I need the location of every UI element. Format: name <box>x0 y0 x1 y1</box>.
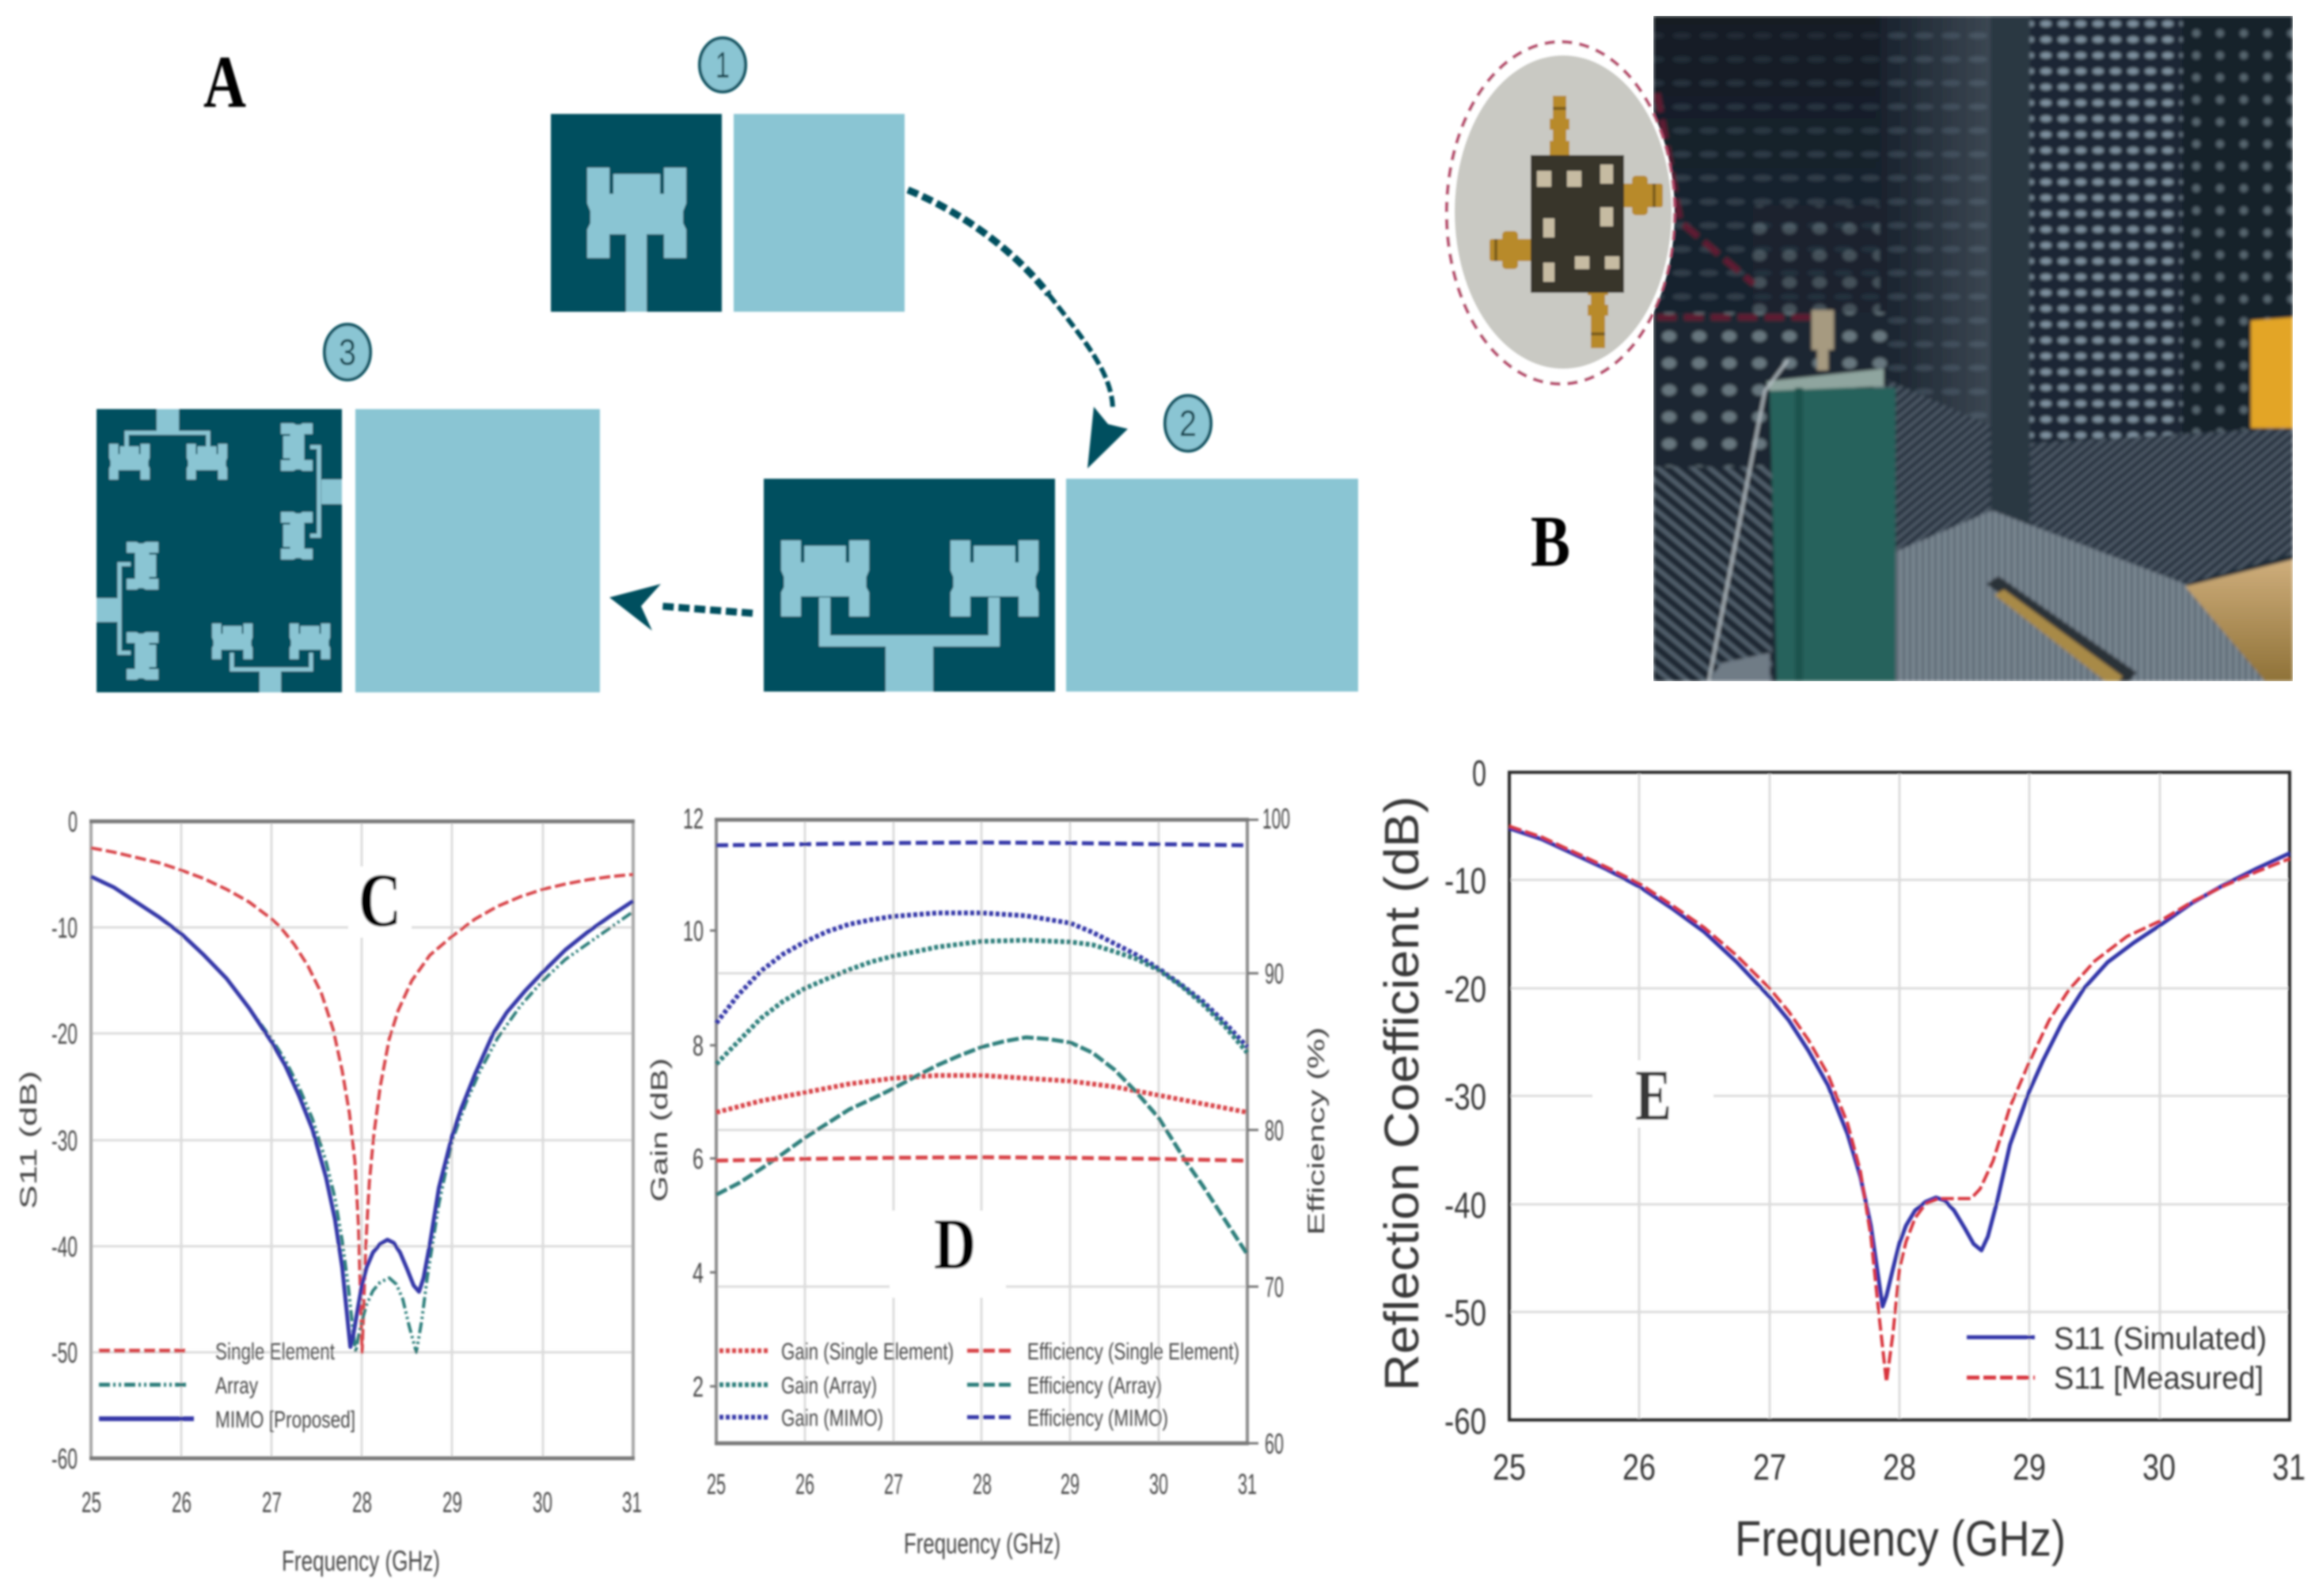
x axis tick labels: 31 <box>1238 1468 1257 1500</box>
panel D: gain and efficiency chart <box>647 802 1330 1560</box>
x axis tick labels: 26 <box>1622 1446 1656 1488</box>
x axis tick labels <box>707 1468 1257 1500</box>
heading letter E: E <box>1635 1055 1672 1135</box>
array curve <box>91 877 633 1352</box>
x axis tick labels: 31 <box>622 1486 642 1518</box>
legend <box>719 1339 1239 1431</box>
x axis tick labels: 29 <box>442 1486 462 1518</box>
inset photo of fabricated antenna with dashed outline <box>1447 42 1675 384</box>
x axis tick labels: 28 <box>1883 1446 1916 1488</box>
y axis title: S11 (dB) <box>16 1071 42 1209</box>
y axis tick labels: -50 <box>1444 1292 1486 1333</box>
measured curve <box>1509 826 2290 1382</box>
x axis tick labels: 26 <box>172 1486 192 1518</box>
x axis tick labels: 27 <box>1753 1446 1786 1488</box>
step 1 number badge: 1 <box>715 44 730 85</box>
efficiency array curve <box>716 1037 1247 1254</box>
x axis title: Frequency (GHz) <box>282 1545 440 1577</box>
heading letter D: D <box>934 1204 976 1284</box>
x axis tick labels: 25 <box>82 1486 101 1518</box>
x axis tick labels: 30 <box>533 1486 552 1518</box>
simulated curve <box>1509 828 2290 1306</box>
legend: Gain (Array) <box>781 1373 877 1399</box>
legend <box>1967 1321 2267 1396</box>
frame <box>1509 772 2290 1420</box>
y axis tick labels: -30 <box>1444 1076 1486 1117</box>
frame <box>89 821 635 1458</box>
y axis tick labels: -10 <box>51 912 78 944</box>
S11 curves <box>91 848 633 1352</box>
panel E: reflection coefficient chart <box>1375 753 2306 1567</box>
x axis tick labels: 30 <box>2142 1446 2176 1488</box>
left axis tick labels: 2 <box>693 1370 704 1403</box>
y axis tick labels: -40 <box>51 1230 78 1263</box>
gridlines <box>1509 772 2290 1420</box>
MIMO proposed curve <box>91 877 633 1347</box>
left axis tick labels <box>683 802 704 1403</box>
y axis tick labels: -30 <box>51 1124 78 1157</box>
legend: Array <box>215 1373 258 1399</box>
legend: Single Element <box>215 1339 335 1365</box>
D letter mask <box>890 1211 1006 1298</box>
y axis tick labels <box>1444 753 1486 1442</box>
step 2 number badge <box>1165 396 1211 451</box>
y axis tick labels: -60 <box>51 1442 78 1475</box>
arrow from step 1 to step 2 <box>908 190 1128 468</box>
y axis title: Reflection Coefficient (dB) <box>1375 796 1429 1391</box>
right y axis title: Efficiency (%) <box>1304 1027 1330 1235</box>
x axis tick labels: 28 <box>973 1468 992 1500</box>
x axis tick labels: 30 <box>1149 1468 1168 1500</box>
reflection curves <box>1509 826 2290 1382</box>
x axis tick labels: 31 <box>2272 1446 2306 1488</box>
right axis tick labels: 60 <box>1265 1427 1284 1460</box>
x axis tick labels: 28 <box>352 1486 372 1518</box>
x axis tick labels: 25 <box>1493 1446 1526 1488</box>
gain and efficiency curves <box>716 843 1247 1254</box>
gain single element curve <box>716 1075 1247 1113</box>
x axis tick labels <box>82 1486 642 1518</box>
panel B: measurement setup photo <box>1447 16 2293 681</box>
legend <box>99 1339 355 1433</box>
efficiency MIMO curve <box>716 843 1247 845</box>
step 1 number badge <box>700 38 746 92</box>
x axis tick labels: 29 <box>2013 1446 2046 1488</box>
x axis tick labels: 29 <box>1061 1468 1080 1500</box>
E letter mask <box>1592 1060 1713 1128</box>
left axis tick labels: 8 <box>693 1029 704 1062</box>
heading letter C: C <box>359 858 401 942</box>
efficiency single element curve <box>716 1157 1247 1161</box>
heading letter A: A <box>203 41 246 123</box>
axis ticks <box>710 820 1258 1443</box>
x axis tick labels: 26 <box>795 1468 814 1500</box>
left axis tick labels: 4 <box>693 1257 704 1289</box>
step 3 number badge <box>324 324 370 380</box>
panel A: antenna design steps <box>97 38 1358 692</box>
single element curve <box>91 848 633 1352</box>
left y axis title: Gain (dB) <box>647 1058 673 1202</box>
step 2 number badge: 2 <box>1179 403 1197 444</box>
gain MIMO curve <box>716 913 1247 1047</box>
x axis tick labels <box>1493 1446 2306 1488</box>
right axis tick labels: 80 <box>1265 1114 1284 1147</box>
y axis tick labels <box>51 806 78 1475</box>
C letter mask <box>348 866 412 938</box>
right axis tick labels: 70 <box>1265 1271 1284 1303</box>
right axis tick labels: 100 <box>1262 802 1290 835</box>
legend: MIMO [Proposed] <box>215 1407 355 1433</box>
x axis tick labels: 25 <box>707 1468 726 1500</box>
panel C: S11 chart <box>16 806 642 1577</box>
y axis tick labels: -20 <box>1444 969 1486 1010</box>
left axis tick labels: 10 <box>683 915 704 947</box>
arrow from step 2 to step 3 <box>609 584 753 631</box>
legend: Efficiency (Single Element) <box>1027 1339 1239 1365</box>
right axis tick labels <box>1262 802 1290 1460</box>
heading letter B: B <box>1531 501 1570 582</box>
gain array curve <box>716 940 1247 1064</box>
gridlines <box>716 820 1247 1443</box>
left axis tick labels: 6 <box>693 1143 704 1175</box>
legend: Gain (MIMO) <box>781 1405 883 1431</box>
step 3 MIMO antenna layout <box>97 409 600 692</box>
legend: Efficiency (Array) <box>1027 1373 1162 1399</box>
step 3 number badge: 3 <box>339 332 356 373</box>
frame <box>715 820 1249 1443</box>
y axis tick labels: 0 <box>1472 753 1486 794</box>
y axis tick labels: -40 <box>1444 1185 1486 1226</box>
y axis tick labels: 0 <box>68 806 78 838</box>
legend: S11 [Measured] <box>2054 1361 2264 1396</box>
step 2 two element array <box>764 479 1358 692</box>
y axis tick labels: -10 <box>1444 860 1486 901</box>
left axis tick labels: 12 <box>683 802 704 835</box>
legend: S11 (Simulated) <box>2054 1321 2267 1356</box>
legend: Efficiency (MIMO) <box>1027 1405 1168 1431</box>
anechoic chamber photo <box>1653 16 2293 681</box>
y axis tick labels: -60 <box>1444 1401 1486 1442</box>
x axis tick labels: 27 <box>262 1486 282 1518</box>
legend: Gain (Single Element) <box>781 1339 954 1365</box>
right axis tick labels: 90 <box>1265 957 1284 990</box>
gridlines <box>91 821 633 1458</box>
x axis tick labels: 27 <box>884 1468 903 1500</box>
x axis title: Frequency (GHz) <box>904 1527 1061 1560</box>
y axis tick labels: -20 <box>51 1018 78 1050</box>
step 1 single element antenna <box>551 114 905 312</box>
x axis title: Frequency (GHz) <box>1735 1511 2066 1567</box>
y axis tick labels: -50 <box>51 1336 78 1369</box>
